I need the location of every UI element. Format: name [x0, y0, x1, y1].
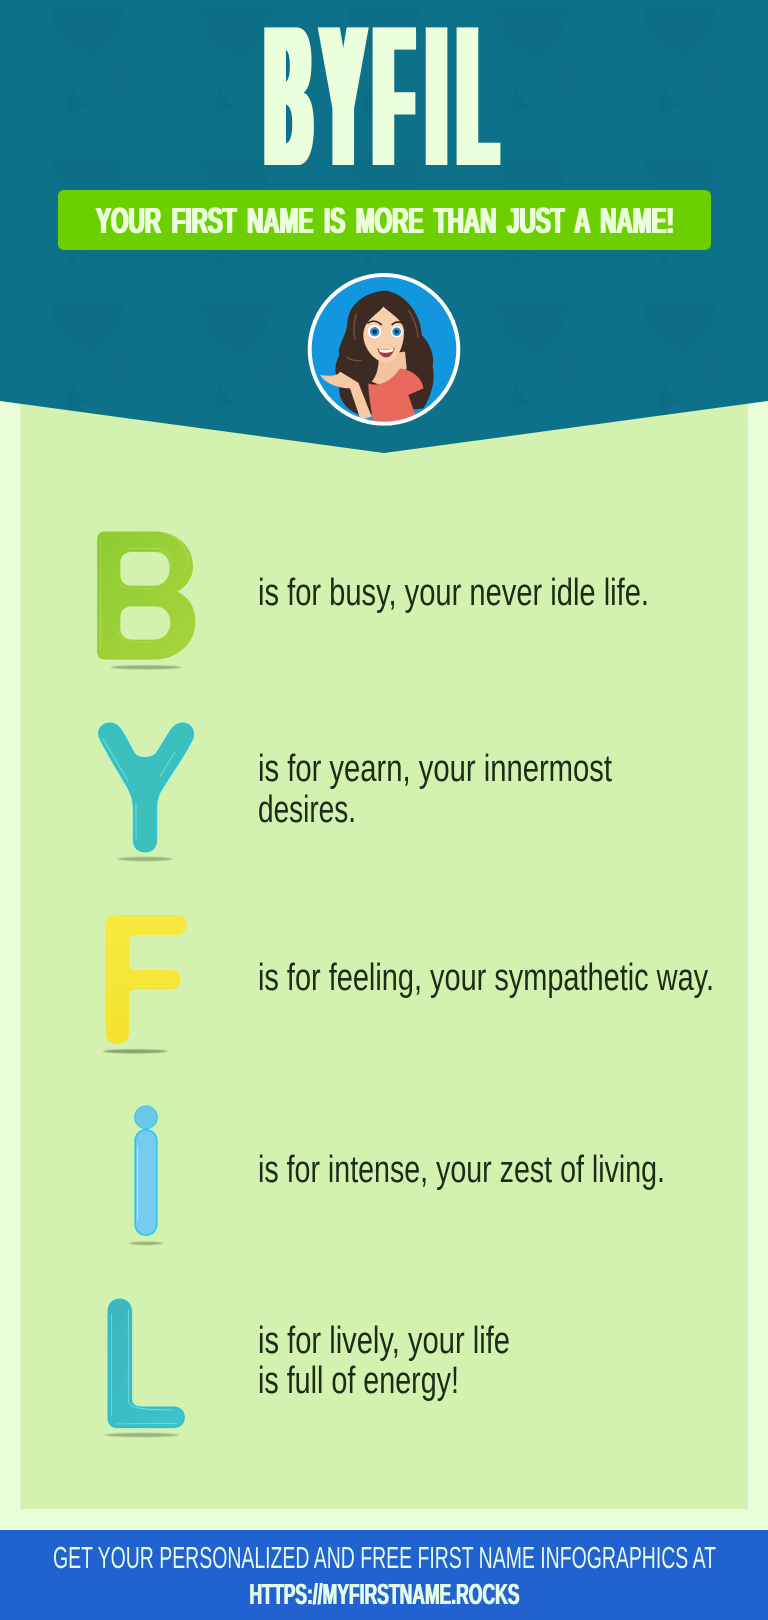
row Y: [99, 723, 612, 861]
header banner: [0, 0, 768, 453]
panel: letter list background: [20, 395, 748, 1509]
text: B line: is for busy, your never idle life.: [258, 572, 649, 614]
avatar: woman in circle: [308, 273, 460, 426]
row F: [103, 915, 714, 1053]
text: L lines: is for lively, your life: [258, 1320, 510, 1362]
row B: [97, 532, 649, 669]
footer url: HTTPS://MYFIRSTNAME.ROCKS: [250, 1579, 520, 1611]
letter Y: [99, 723, 193, 861]
text: L lines: [258, 1320, 510, 1402]
banner: tagline: [58, 190, 711, 250]
letter F: [103, 915, 187, 1053]
text: Y lines: desires.: [258, 789, 356, 831]
letter B: [97, 532, 195, 669]
footer: [0, 1530, 768, 1620]
text: L lines: is full of energy!: [258, 1360, 459, 1402]
text: Y lines: [258, 748, 612, 831]
text: Y lines: is for yearn, your innermost: [258, 748, 612, 790]
row L: [105, 1299, 510, 1437]
letter L: [105, 1299, 184, 1437]
letter i: [129, 1106, 163, 1245]
row I: [129, 1106, 665, 1245]
